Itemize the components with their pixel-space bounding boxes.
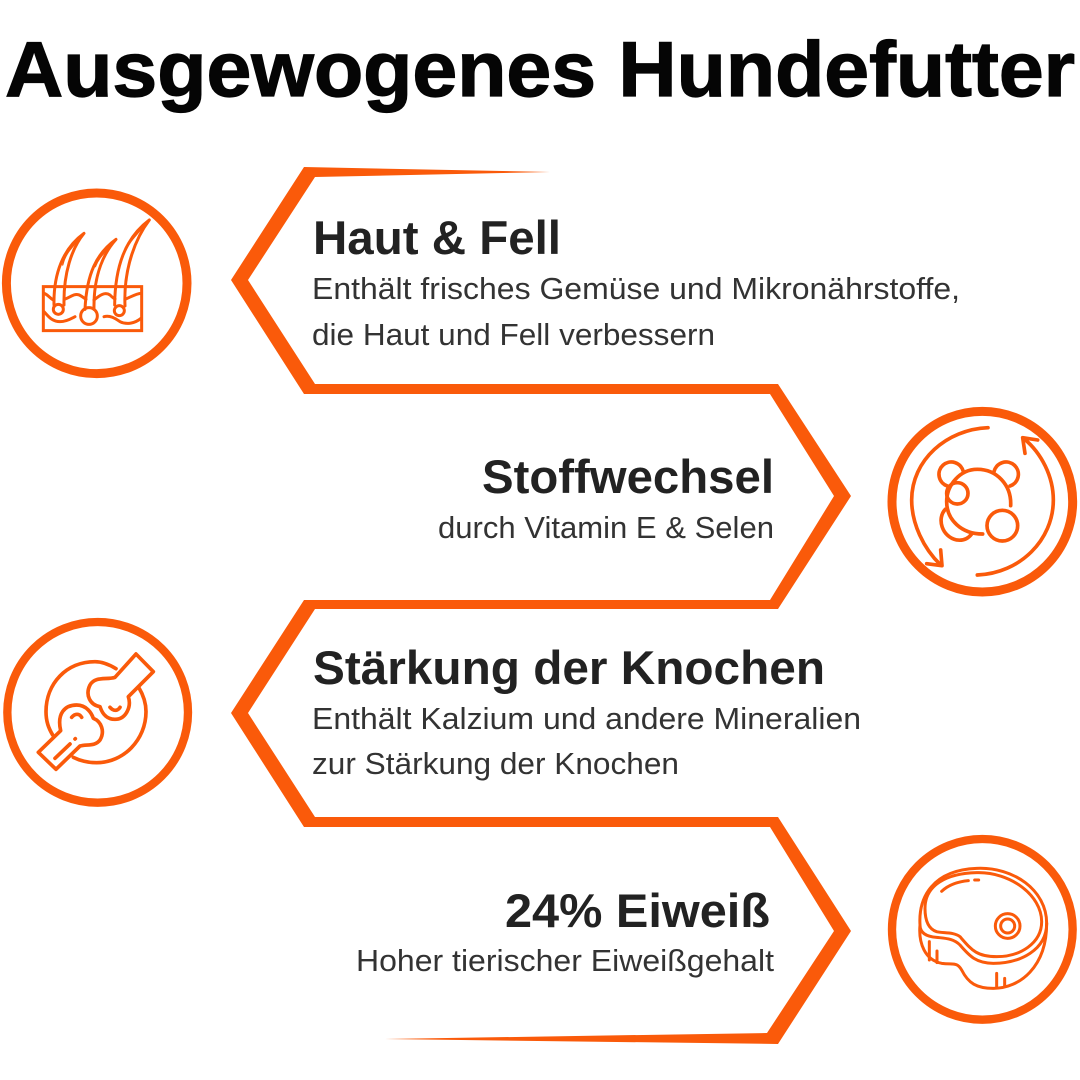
heading: 24% Eiweiß: 24% Eiweiß — [505, 884, 770, 937]
section: Stärkung der Knochen — [312, 641, 861, 781]
text: Knochen description — [312, 701, 861, 781]
icon: metabolism bear cycle — [892, 411, 1073, 592]
text: Knochen description: Enthält Kalzium und andere Mineralien — [312, 701, 861, 736]
heading: Stoffwechsel: Stoffwechsel — [482, 450, 774, 503]
text: Eiweiß description: Hoher tierischer Eiweißgehalt — [356, 943, 774, 978]
section: Stoffwechsel — [438, 450, 774, 545]
section: 24% Eiweiß — [356, 884, 774, 978]
text: Knochen description: zur Stärkung der Knochen — [312, 746, 679, 781]
heading: Stärkung der Knochen: Stärkung der Knochen — [313, 641, 825, 694]
section: Haut & Fell — [312, 211, 960, 352]
heading: Haut & Fell: Haut & Fell — [313, 211, 561, 264]
icon: steak — [892, 839, 1073, 1020]
icon: bone joint — [7, 622, 188, 803]
text: Stoffwechsel description: durch Vitamin E & Selen — [438, 510, 774, 545]
title: Ausgewogenes Hundefutter — [5, 25, 1075, 113]
text: Haut & Fell description: Enthält frisches Gemüse und Mikronährstoffe, — [312, 271, 960, 306]
text: Haut & Fell description — [312, 271, 960, 352]
text: Haut & Fell description: die Haut und Fell verbessern — [312, 317, 715, 352]
zigzag ribbon — [231, 167, 851, 1044]
icon: skin and hair — [6, 193, 187, 374]
